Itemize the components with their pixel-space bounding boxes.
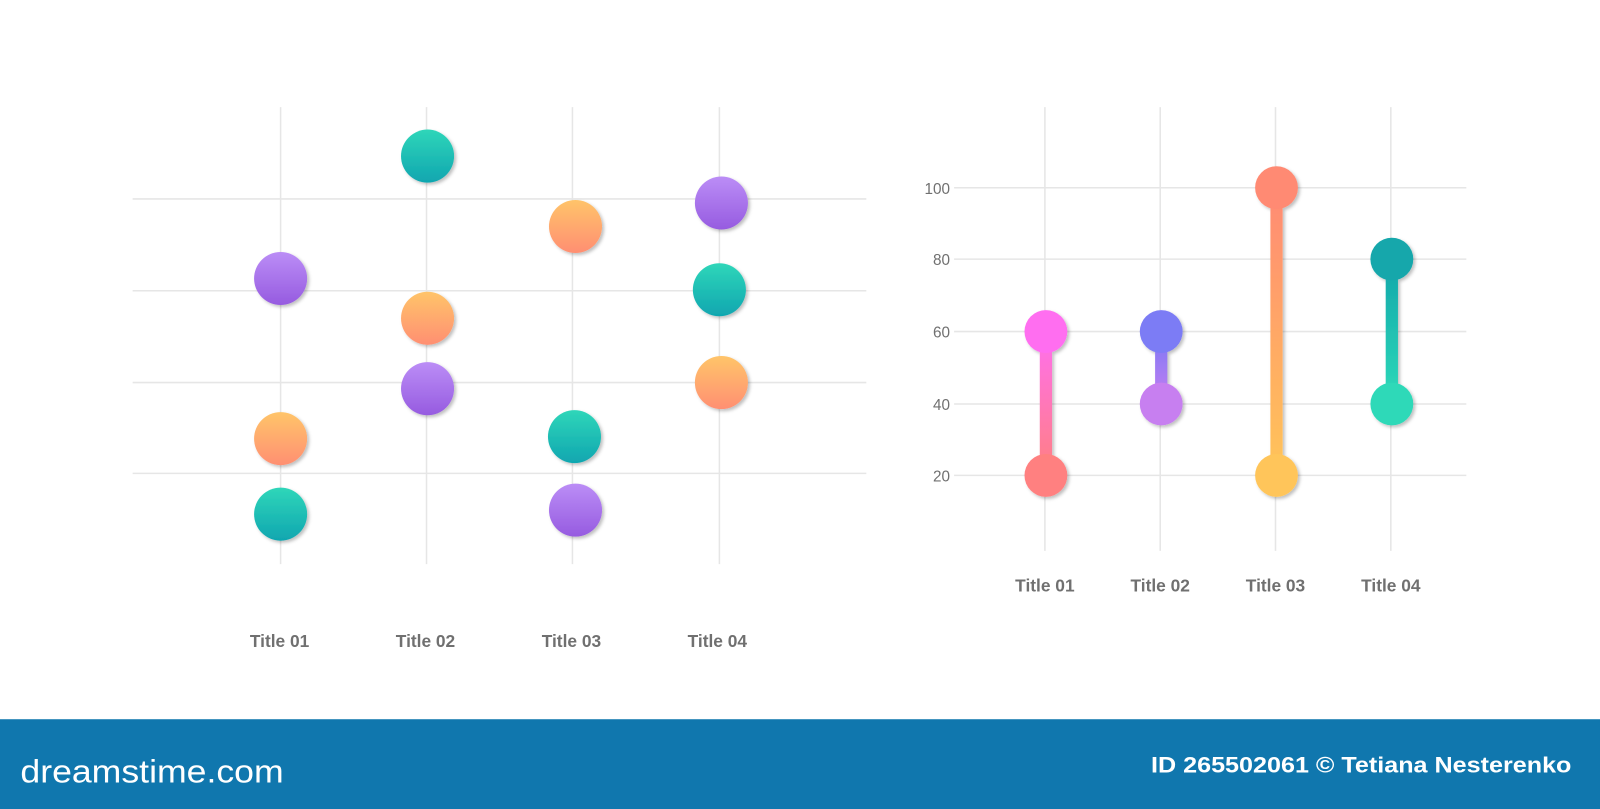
x labels right: Title 04 xyxy=(1361,576,1421,596)
y axis labels: 100 xyxy=(924,181,950,198)
y axis labels: 20 xyxy=(933,469,950,486)
footer credit: ID 265502061 © Tetiana Nesterenko xyxy=(1151,752,1571,777)
y axis labels: 80 xyxy=(933,252,950,269)
panel: right dumbbell chart xyxy=(924,107,1466,596)
y axis labels: 60 xyxy=(933,325,950,342)
footer logo: dreamstime.com xyxy=(20,752,284,789)
x labels right xyxy=(1015,576,1421,596)
y axis labels: 40 xyxy=(933,397,950,414)
dumbbell: Title 02 xyxy=(1140,310,1183,425)
x labels left: Title 03 xyxy=(542,631,601,651)
dumbbell: Title 04 xyxy=(1370,238,1413,425)
dots: Title 03 xyxy=(548,200,602,537)
dots: Title 04 xyxy=(693,176,748,409)
dots: Title 01 xyxy=(254,252,307,541)
footer bar xyxy=(0,719,1600,809)
x labels left xyxy=(250,631,747,651)
dots: Title 02 xyxy=(401,130,454,415)
x labels left: Title 02 xyxy=(396,631,455,651)
dumbbell: Title 01 xyxy=(1024,310,1067,497)
x labels left: Title 01 xyxy=(250,631,310,651)
panel: left dot chart xyxy=(133,107,866,651)
x labels right: Title 02 xyxy=(1130,576,1190,596)
x labels right: Title 03 xyxy=(1246,576,1306,596)
x labels left: Title 04 xyxy=(688,631,747,651)
dumbbell: Title 03 xyxy=(1255,166,1298,497)
y axis labels xyxy=(924,181,950,486)
x labels right: Title 01 xyxy=(1015,576,1075,596)
